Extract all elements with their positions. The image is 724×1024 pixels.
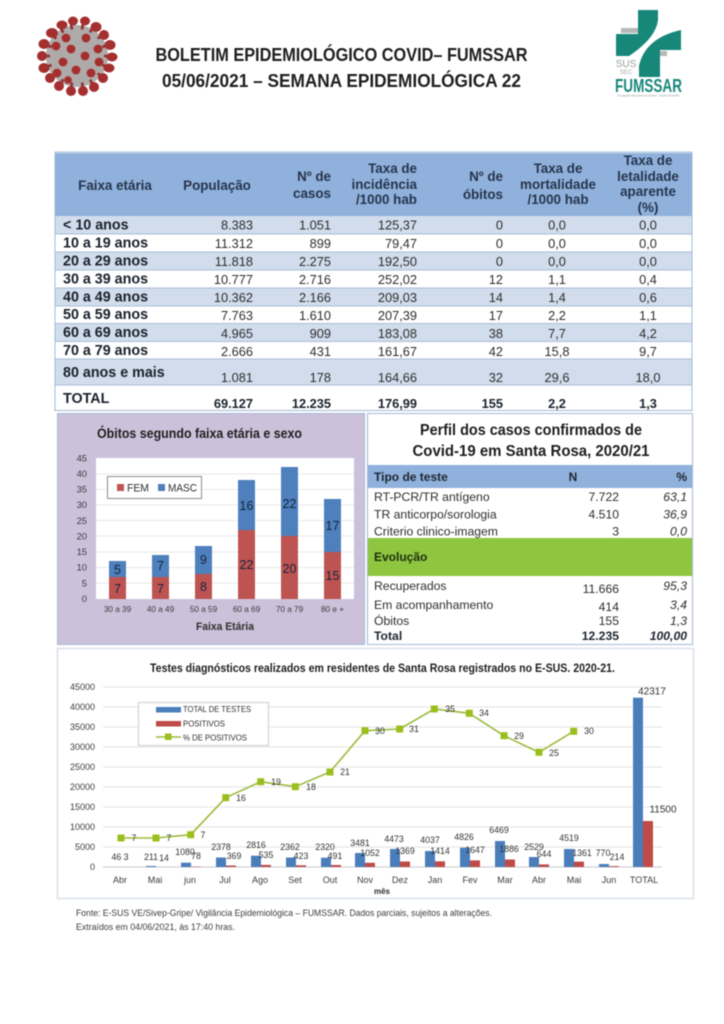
table header: óbitos [463, 187, 503, 202]
panel heading [412, 422, 650, 460]
percent labels: 7 [201, 830, 206, 840]
bar value labels: 4826 [454, 832, 474, 842]
x axis month labels [113, 875, 658, 885]
row: 70 to 79: 15,8 [545, 344, 569, 359]
y axis labels: 35 [77, 484, 87, 494]
bar value labels: 20 [283, 562, 296, 576]
table header: /1000 hab [527, 192, 589, 207]
y axis labels: 0 [82, 593, 87, 604]
table header: aparente [620, 184, 676, 199]
bar value labels: 15 [326, 569, 339, 583]
row: under 10: < 10 anos [63, 218, 129, 234]
bar value labels: 22 [240, 558, 253, 572]
x axis month labels: Out [323, 875, 338, 885]
outcome rows: 12.235 [582, 629, 619, 643]
outcome rows: Total [374, 629, 402, 643]
stacked bar chart [77, 452, 354, 633]
bar value labels: 78 [191, 851, 201, 861]
row: 10 to 19 [63, 236, 657, 252]
legend [138, 702, 268, 746]
outcome rows: 100,00 [650, 629, 687, 643]
table header: Nº de [469, 169, 503, 184]
y axis labels: 20000 [70, 782, 95, 792]
panel: deaths by age and sex [58, 414, 364, 644]
row: 50 to 59: 1,1 [639, 308, 657, 323]
outcome rows: 1,3 [670, 614, 687, 628]
bar value labels: 7 [114, 582, 121, 596]
bar value labels: 369 [227, 851, 241, 861]
row: 70 to 79: 2.666 [221, 344, 253, 359]
row: 40 to 49: 1,4 [548, 290, 566, 305]
row: 10 to 19: 0 [496, 236, 503, 251]
row: 30 to 39 [63, 272, 657, 288]
row: 30 to 39: 252,02 [378, 272, 417, 287]
outcome header [368, 538, 692, 576]
row: 10 to 19: 899 [310, 236, 331, 251]
row: 50 to 59 [63, 307, 657, 323]
x axis month labels: Mai [567, 875, 581, 885]
panel: age group table [55, 152, 692, 411]
row: total: TOTAL [63, 391, 110, 407]
bar value labels: 535 [259, 850, 273, 860]
legend [108, 476, 202, 498]
y axis labels [77, 452, 87, 604]
row: 30 to 39: 10.777 [214, 272, 253, 287]
x axis labels [104, 605, 344, 614]
bar value labels: 46 3 [111, 852, 129, 862]
legend: FEM [127, 482, 149, 494]
x axis month labels: Nov [357, 875, 373, 885]
test type header: % [676, 470, 687, 484]
row: 80 and over: 18,0 [636, 370, 660, 385]
test type rows: 7.722 [588, 490, 619, 504]
bar value labels: 2529 [524, 842, 544, 852]
table header: (%) [638, 200, 658, 215]
row: 60 to 69: 4.965 [221, 326, 253, 341]
table header: Taxa de [368, 161, 417, 176]
bars: positives [191, 821, 653, 867]
outcome rows: 414 [599, 600, 619, 614]
row: total: 1,3 [639, 396, 657, 411]
y axis labels: 10000 [70, 822, 95, 832]
bar value labels: 491 [328, 851, 342, 861]
percent labels: 16 [236, 793, 246, 803]
bar value labels: 8 [200, 580, 207, 594]
bar value labels: 214 [610, 852, 624, 862]
row: 40 to 49: 209,03 [378, 290, 417, 305]
outcome rows: 11.666 [583, 582, 619, 596]
row: 30 to 39: 12 [489, 272, 503, 287]
x axis labels: 70 a 79 [276, 605, 304, 614]
outcome rows: 3,4 [670, 598, 687, 612]
row: 50 to 59: 7.763 [221, 308, 253, 323]
source note: Fonte: E-SUS VE/Sivep-Gripe/ Vigilância Epidemiológica – FUMSSAR. Dados parciais, sujeitos a alterações. [76, 908, 492, 919]
x axis month labels: jun [183, 875, 196, 885]
percent labels: 31 [409, 724, 419, 734]
percent labels: 19 [271, 777, 281, 787]
logo: FUMSSAR: SEC [620, 70, 633, 76]
test type rows: 0,0 [670, 524, 687, 538]
row: 20 to 29 [63, 254, 657, 270]
percent labels: 18 [306, 782, 316, 792]
row: 60 to 69: 183,08 [378, 326, 417, 341]
percent labels: 7 [167, 833, 172, 843]
percent labels: 30 [584, 726, 594, 736]
x axis month labels: TOTAL [630, 875, 658, 885]
table header: casos [293, 186, 331, 201]
source note [76, 908, 492, 933]
bar value labels: 2378 [211, 842, 231, 852]
row: 80 and over: 80 anos e mais [63, 365, 165, 381]
logo: FUMSSAR: SUS [616, 59, 637, 70]
row: 70 to 79: 431 [310, 344, 331, 359]
row: 10 to 19: 0,0 [639, 236, 657, 251]
bar value labels: 770 [596, 848, 610, 858]
row: 70 to 79: 161,67 [378, 344, 417, 359]
outcome rows: 155 [599, 614, 619, 628]
percent labels: 30 [375, 726, 385, 736]
line: percent positive [118, 706, 577, 842]
percent labels: 7 [132, 833, 137, 843]
panel heading: Covid-19 em Santa Rosa, 2020/21 [412, 443, 650, 460]
legend: POSITIVOS [183, 718, 225, 728]
bar value labels: 2362 [280, 842, 300, 852]
logo: FUMSSAR: FUMSSAR [615, 76, 682, 96]
y axis labels: 0 [90, 862, 95, 872]
test type header [368, 465, 692, 488]
x axis month labels: Jan [428, 875, 442, 885]
y axis labels: 25 [77, 515, 87, 526]
x axis month labels: Jul [219, 875, 231, 885]
row: 50 to 59: 207,39 [378, 308, 417, 323]
row: 20 to 29: 20 a 29 anos [63, 254, 148, 270]
row: 60 to 69: 7,7 [548, 326, 566, 341]
bar value labels: 423 [294, 851, 308, 861]
row: 60 to 69: 60 a 69 anos [63, 325, 148, 341]
row: 60 to 69: 909 [310, 326, 331, 341]
row: total: 69.127 [214, 396, 253, 411]
row: 80 and over: 164,66 [378, 370, 417, 385]
title: BOLETIM EPIDEMIOLÓGICO COVID– FUMSSAR [156, 44, 528, 65]
row: under 10: 0,0 [639, 218, 657, 232]
percent labels: 34 [479, 708, 489, 718]
row: total: 176,99 [378, 396, 417, 411]
percent labels: 35 [445, 704, 455, 714]
row: 70 to 79: 42 [489, 344, 503, 359]
bars: MASC [109, 467, 341, 577]
row: 40 to 49: 40 a 49 anos [63, 290, 148, 306]
y axis labels: 15 [77, 546, 87, 557]
row: 60 to 69: 4,2 [639, 326, 657, 341]
test type rows: 36,9 [663, 508, 687, 522]
row: 40 to 49: 0,6 [639, 290, 657, 305]
x axis title: Faixa Etária [196, 621, 255, 633]
outcome rows: Óbitos [374, 613, 409, 628]
x axis labels: 80 e + [321, 605, 344, 614]
bar value labels: 6469 [489, 825, 509, 835]
x axis labels: 60 a 69 [233, 605, 261, 614]
bar value labels: 1080 [175, 847, 195, 857]
row: 60 to 69: 38 [489, 326, 503, 341]
outcome header: Evolução [374, 550, 427, 564]
row: 20 to 29: 11.818 [215, 254, 253, 269]
bar value labels: 1647 [465, 845, 485, 855]
table header: /1000 hab [356, 192, 417, 207]
bar value labels: 2816 [246, 840, 266, 850]
bar value labels: 1414 [430, 846, 450, 856]
test type rows [374, 490, 687, 538]
row: 50 to 59: 1.610 [299, 308, 331, 323]
bar value labels: 3481 [350, 838, 370, 848]
bar value labels: 2320 [315, 842, 335, 852]
row: 80 and over: 29,6 [545, 370, 569, 385]
bar value labels: 5 [114, 563, 121, 577]
row: 70 to 79 [63, 343, 657, 359]
row: under 10 [63, 218, 657, 234]
chart heading: Testes diagnósticos realizados em residentes de Santa Rosa registrados no E-SUS. 2020-21. [150, 661, 615, 675]
bar value labels: 7 [157, 559, 164, 573]
table header: Taxa de [624, 153, 672, 168]
bar value labels: 4519 [559, 833, 579, 843]
row: total: 155 [482, 396, 503, 411]
row: total [63, 391, 657, 411]
row: 20 to 29: 0,0 [639, 254, 657, 269]
outcome rows: Recuperados [374, 579, 446, 593]
percent labels [132, 704, 594, 843]
outcome rows: 95,3 [663, 579, 687, 593]
panel heading: Perfil dos casos confirmados de [420, 422, 642, 439]
gridlines [103, 687, 662, 847]
table header: População [183, 178, 251, 193]
row: 10 to 19: 10 a 19 anos [63, 236, 148, 252]
bar value labels: 4037 [420, 835, 440, 845]
row: 50 to 59: 17 [489, 308, 503, 323]
table header: Nº de [297, 169, 331, 184]
row: 70 to 79: 9,7 [639, 344, 657, 359]
test type rows: 3 [612, 524, 619, 538]
logo: FUMSSAR: Fundação Municipal de Saúde · Santa Rosa/RS [618, 94, 680, 98]
y axis labels: 45 [77, 452, 87, 464]
y axis labels [70, 682, 95, 872]
row: 50 to 59: 2,2 [548, 308, 566, 323]
bar value labels: 22 [283, 497, 296, 511]
panel: confirmed case profile [368, 414, 692, 644]
row: 40 to 49: 10.362 [214, 290, 253, 305]
x axis labels: 40 a 49 [147, 605, 175, 614]
percent labels: 29 [514, 731, 524, 741]
bar value labels: 14 [159, 853, 169, 863]
y axis labels: 20 [77, 530, 87, 542]
bar value labels: 7 [157, 582, 164, 596]
bars: FEM [109, 530, 341, 599]
title [156, 44, 528, 91]
row: 80 and over [63, 365, 660, 385]
outcome rows: Em acompanhamento [374, 598, 493, 612]
row: 20 to 29: 0,0 [548, 254, 566, 269]
row: 60 to 69 [63, 325, 657, 341]
y axis labels: 5000 [75, 842, 95, 852]
x axis month labels: Abr [113, 875, 127, 885]
outcome rows [374, 579, 687, 643]
legend: MASC [168, 482, 197, 494]
y axis labels: 5 [82, 578, 87, 588]
row: 30 to 39: 30 a 39 anos [63, 272, 148, 288]
row: 30 to 39: 2.716 [299, 272, 331, 287]
row: 20 to 29: 192,50 [378, 254, 417, 269]
row: 20 to 29: 0 [496, 254, 503, 269]
row: 50 to 59: 50 a 59 anos [63, 307, 148, 323]
x axis month labels: Fev [462, 875, 478, 885]
panel: diagnostic tests chart [58, 648, 694, 898]
x axis month labels: Mai [148, 875, 162, 885]
row: 10 to 19: 79,47 [385, 236, 417, 251]
bar value labels [111, 686, 677, 863]
x axis month labels: Mar [497, 875, 513, 885]
test type rows: 4.510 [588, 508, 619, 522]
bar value labels: 16 [240, 499, 253, 513]
test type rows: Criterio clinico-imagem [374, 524, 498, 538]
bar value labels: 42317 [638, 686, 666, 698]
x axis month labels: Ago [252, 875, 268, 885]
row: 40 to 49 [63, 290, 657, 306]
row: 40 to 49: 14 [489, 290, 503, 305]
bar value labels: 1361 [572, 848, 592, 858]
x axis month labels: Jun [602, 875, 616, 885]
table header: Taxa de [534, 161, 582, 176]
y axis labels: 30000 [70, 742, 95, 752]
y axis labels: 40000 [70, 702, 95, 712]
row: 80 and over: 32 [489, 370, 503, 385]
row: under 10: 125,37 [378, 218, 417, 232]
row: under 10: 0 [496, 218, 503, 232]
percent labels: 21 [340, 767, 350, 777]
bars: total tests [146, 698, 643, 867]
test type header: N [569, 470, 577, 484]
row: 10 to 19: 11.312 [215, 236, 253, 251]
x axis title: mês [374, 887, 391, 896]
row: 80 and over: 1.081 [221, 370, 253, 385]
logo: FUMSSAR [615, 10, 682, 98]
title: 05/06/2021 – SEMANA EPIDEMIOLÓGICA 22 [162, 70, 521, 91]
source note: Extraídos em 04/06/2021, às 17:40 hras. [76, 922, 235, 933]
y axis labels: 25000 [70, 762, 95, 772]
test type header: Tipo de teste [374, 470, 448, 484]
y axis labels: 40 [77, 468, 87, 479]
row: 80 and over: 178 [310, 370, 331, 385]
legend: % DE POSITIVOS [183, 732, 247, 742]
row: 30 to 39: 0,4 [639, 272, 657, 287]
bar value labels: 644 [537, 849, 551, 859]
bar value labels: 211 [144, 852, 158, 862]
x axis labels: 30 a 39 [104, 605, 132, 614]
x axis month labels: Dez [392, 875, 408, 885]
test type rows: TR anticorpo/sorologia [374, 508, 497, 522]
percent labels: 25 [549, 748, 559, 758]
bar value labels: 1886 [499, 844, 519, 854]
table header: incidência [352, 177, 418, 192]
bar value labels: 11500 [649, 804, 677, 816]
row: 70 to 79: 70 a 79 anos [63, 343, 148, 359]
y axis labels: 30 [77, 499, 87, 510]
bar value labels: 1052 [360, 848, 380, 858]
row: total: 12.235 [292, 396, 331, 411]
icon: coronavirus [37, 16, 118, 96]
row: under 10: 0,0 [548, 218, 566, 232]
bar value labels: 1369 [395, 846, 415, 856]
x axis labels: 50 a 59 [190, 605, 218, 614]
bar value labels [114, 497, 339, 596]
y axis labels: 10 [77, 562, 87, 572]
row: under 10: 8.383 [221, 218, 253, 232]
y axis labels: 45000 [70, 682, 95, 692]
test type rows: RT-PCR/TR antígeno [374, 490, 490, 504]
row: 10 to 19: 0,0 [548, 236, 566, 251]
y axis labels: 35000 [70, 722, 95, 732]
test type rows: 63,1 [663, 490, 687, 504]
row: 30 to 39: 1,1 [548, 272, 566, 287]
bar value labels: 17 [326, 519, 339, 533]
x axis month labels: Set [288, 875, 302, 885]
legend: TOTAL DE TESTES [183, 704, 251, 714]
row: 40 to 49: 2.166 [299, 290, 331, 305]
chart heading: Óbitos segundo faixa etária e sexo [97, 424, 302, 441]
table header: letalidade [617, 169, 679, 184]
table header: mortalidade [520, 177, 596, 192]
bar value labels: 4473 [384, 834, 404, 844]
table header [56, 153, 692, 216]
x axis month labels: Abr [532, 875, 546, 885]
table header: Faixa etária [78, 178, 152, 193]
bar value labels: 9 [200, 553, 207, 567]
row: 20 to 29: 2.275 [299, 254, 331, 269]
y axis labels: 15000 [70, 802, 95, 812]
row: total: 2,2 [548, 396, 566, 411]
row: under 10: 1.051 [299, 218, 331, 232]
